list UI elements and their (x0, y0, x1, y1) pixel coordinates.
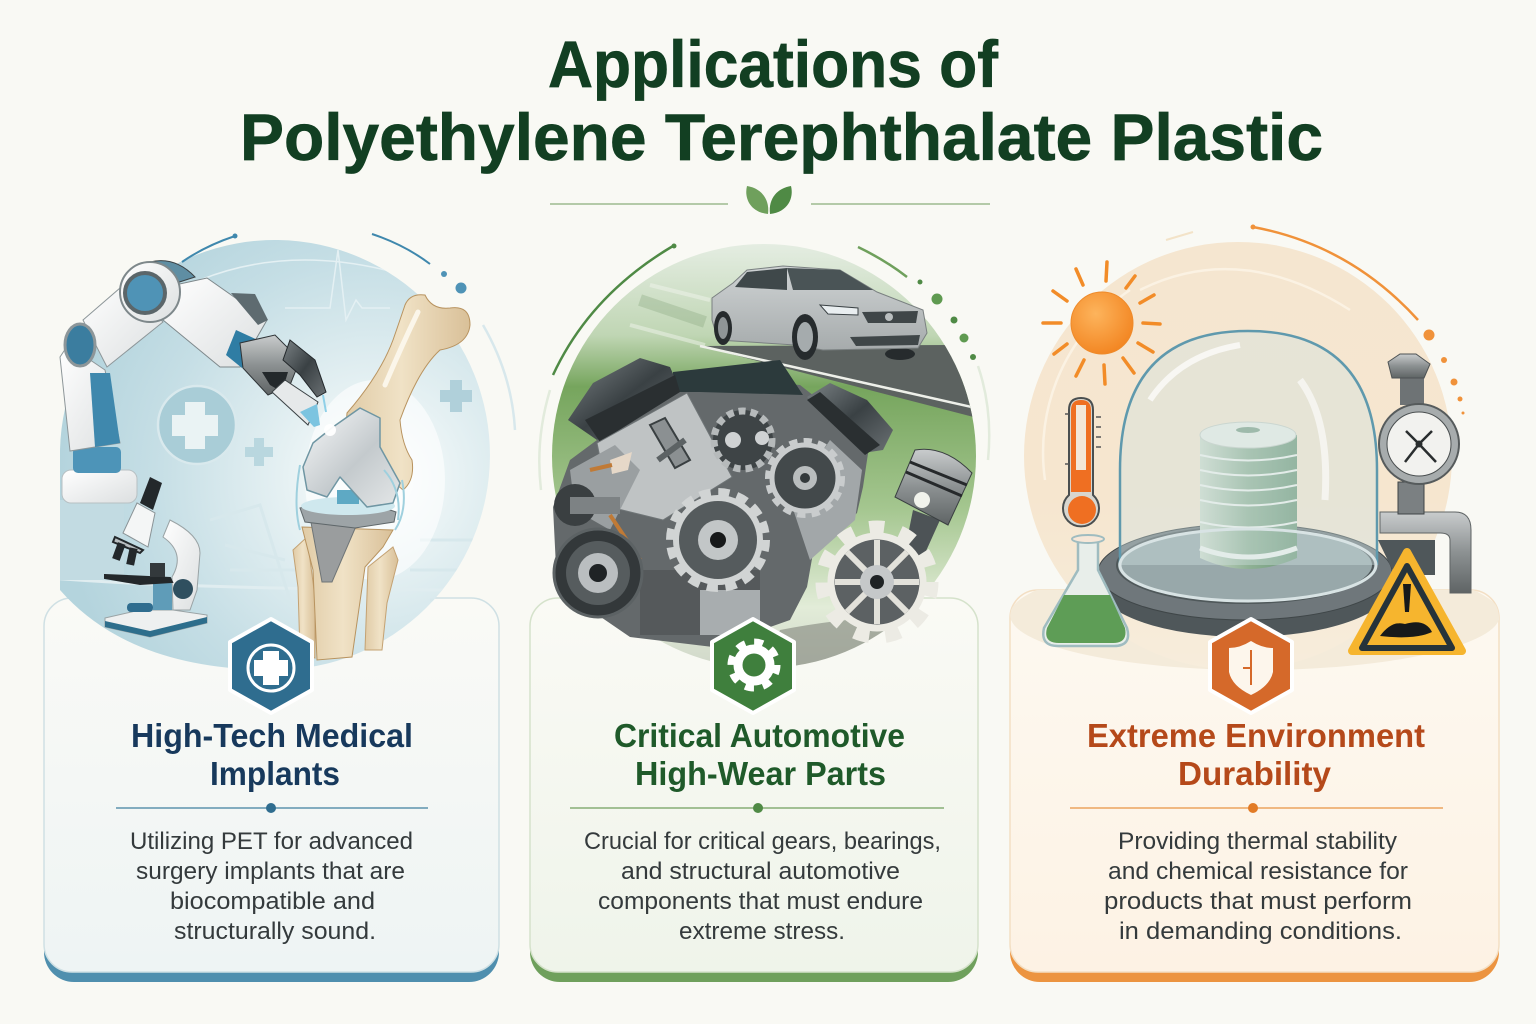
text: medical description: biocompatible and (170, 888, 375, 915)
text: durability description: in demanding conditions. (1119, 918, 1402, 945)
text: durability description: and chemical resistance for (1108, 858, 1408, 885)
title: Applications of (548, 27, 999, 101)
piston (895, 449, 972, 560)
text: medical description: surgery implants that are (136, 858, 405, 885)
text: durability description (1104, 828, 1412, 945)
thermometer (1063, 398, 1101, 526)
text: durability description: Providing thermal stability (1118, 828, 1397, 855)
car (712, 266, 927, 360)
text: medical description (130, 828, 413, 945)
glass dome (1120, 331, 1377, 601)
text: automotive description: and structural automotive (621, 858, 900, 885)
text: medical description: Utilizing PET for advanced (130, 828, 413, 855)
warning triangle (1352, 552, 1462, 651)
heading: durability: Extreme Environment (1087, 717, 1425, 754)
gears (554, 410, 972, 637)
title (240, 27, 1323, 174)
title: Polyethylene Terephthalate Plastic (240, 100, 1323, 174)
durability accent arcs and dots (1166, 224, 1464, 414)
text: automotive description: Crucial for critical gears, bearings, (584, 828, 941, 855)
warm backdrop circle (1024, 242, 1452, 585)
chemical flask (1043, 535, 1128, 646)
illustration: car, engine, gears and piston (539, 240, 989, 680)
heading: automotive (614, 717, 905, 792)
divider: durability (1070, 803, 1443, 813)
faint cross badge (158, 386, 236, 464)
small gear (713, 410, 773, 470)
text: automotive description: extreme stress. (679, 918, 845, 945)
card: medical (44, 598, 499, 982)
panel: critical automotive high-wear parts (530, 240, 989, 982)
sun (1043, 262, 1160, 384)
medical backdrop circle (50, 230, 500, 680)
heading: medical: High-Tech Medical (131, 717, 413, 754)
card: automotive (530, 598, 978, 982)
road backdrop circle (550, 240, 985, 680)
PET spool (1200, 422, 1297, 569)
medium gear (769, 442, 841, 514)
heading: automotive: Critical Automotive (614, 717, 905, 754)
heading: automotive: High-Wear Parts (635, 755, 886, 792)
heading: durability (1087, 717, 1425, 792)
pressure gauge and pipe (1378, 354, 1471, 593)
icon: medical cross hexagon (230, 619, 312, 713)
panel: extreme environment durability (1010, 224, 1500, 982)
heading: medical (131, 717, 413, 792)
text: automotive description (584, 828, 941, 945)
title divider with leaf icon (550, 186, 990, 214)
robot arm (60, 261, 326, 503)
text: medical description: structurally sound. (174, 918, 376, 945)
wheel gear (822, 527, 932, 637)
icon: gear hexagon (712, 619, 794, 713)
divider: medical (116, 803, 428, 813)
base plate (1098, 524, 1392, 637)
illustration: robot arm, knee implant and microscope (50, 230, 515, 680)
pulley (554, 529, 642, 617)
text: durability description: products that must perform (1104, 888, 1412, 915)
microscope (105, 477, 207, 637)
card: durability (1010, 560, 1500, 982)
panel: high-tech medical implants (44, 230, 515, 982)
knee implant and bones (293, 295, 470, 660)
medical accent arcs and dots (182, 234, 515, 430)
icon: shield hexagon (1210, 619, 1292, 713)
large gear (671, 493, 765, 587)
illustration: bell jar, sun, gauge, flask and warning sign (1020, 224, 1471, 672)
text: automotive description: components that must endure (598, 888, 923, 915)
automotive accent arcs and dots (539, 244, 989, 490)
divider: automotive (570, 803, 944, 813)
engine (553, 358, 893, 647)
heading: durability: Durability (1178, 755, 1332, 792)
heading: medical: Implants (210, 755, 340, 792)
